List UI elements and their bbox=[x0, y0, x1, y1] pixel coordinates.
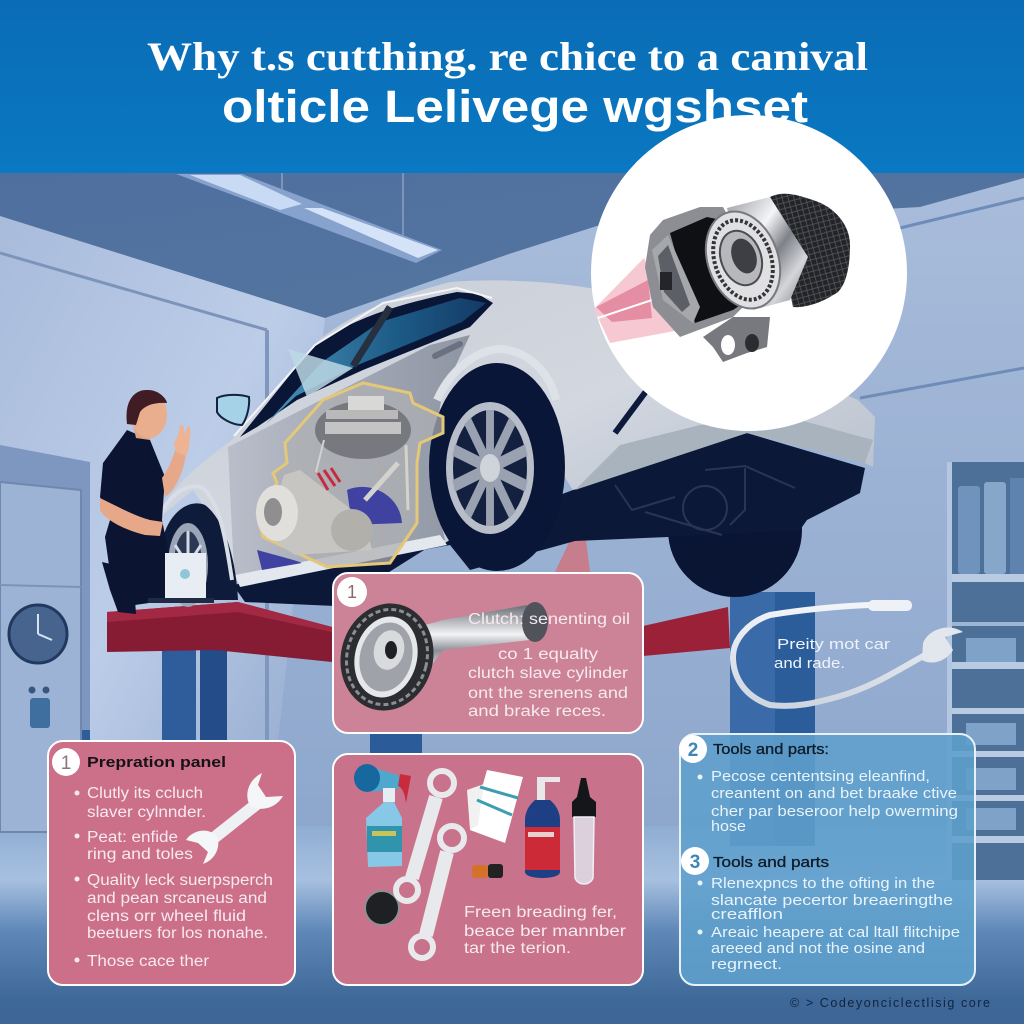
panel: clutch slave cylinder summary: and brake reces. bbox=[468, 703, 606, 720]
sill highlight bbox=[235, 535, 447, 587]
section 3 heading: 3 bbox=[690, 852, 700, 873]
title banner: Why t.s cutthing. re chice to a canival bbox=[147, 34, 868, 79]
door handle bbox=[435, 344, 460, 356]
section 3 text: slancate pecertor breaeringthe bbox=[711, 893, 953, 909]
middle wheel bbox=[437, 349, 556, 400]
suspension detail bbox=[615, 466, 795, 535]
section 3 text: regrnect. bbox=[711, 957, 782, 973]
panel: tools and parts bbox=[679, 734, 975, 985]
laptop bbox=[148, 553, 214, 603]
panel: tools and supplies bbox=[333, 754, 643, 985]
number badge: 1 bbox=[61, 753, 71, 774]
section 3 text: Areaic heapere at cal ltall flitchipe bbox=[711, 925, 960, 941]
icon: cloth bbox=[467, 770, 523, 843]
callout: clutch slave cylinder close-up bbox=[591, 115, 907, 431]
section 2 text: hose bbox=[711, 819, 746, 835]
panel: tools and supplies: tar the terion. bbox=[464, 940, 571, 957]
bleeder hose with wrench bbox=[733, 600, 963, 706]
bullet list: slaver cylnnder. bbox=[87, 804, 206, 821]
arms bbox=[100, 498, 163, 536]
icon: dropper vial bbox=[572, 778, 596, 884]
section 3 text: creafflon bbox=[711, 907, 783, 923]
panel: clutch slave cylinder summary: clutch slave cylinder bbox=[468, 665, 628, 682]
section 3 text: Rlenexpncs to the ofting in the bbox=[711, 876, 935, 892]
car bbox=[160, 280, 875, 607]
door with wall clock bbox=[0, 445, 90, 832]
mechanic bbox=[100, 390, 214, 614]
bullet list: Peat: enfide bbox=[87, 829, 178, 846]
side windows bbox=[240, 292, 493, 437]
panel: preparation bbox=[48, 741, 295, 985]
section 2 heading: 2 bbox=[688, 740, 698, 761]
icon: spanners bbox=[396, 771, 464, 958]
title banner bbox=[0, 0, 1024, 173]
rear wheel bbox=[668, 463, 802, 597]
section 3 heading: Tools and parts bbox=[713, 854, 829, 871]
section 2 text bbox=[698, 769, 958, 835]
section 3 text bbox=[698, 876, 960, 973]
bullet list: clens orr wheel fluid bbox=[87, 908, 246, 925]
front arch and wheel bbox=[160, 503, 238, 600]
section 3 text: areeed and not the osine and bbox=[711, 941, 925, 957]
mount lugs bbox=[703, 317, 770, 362]
panel: tools and supplies: Freen breading fer, bbox=[464, 904, 617, 921]
head bbox=[133, 425, 152, 440]
panel: clutch slave cylinder summary: co 1 equalty bbox=[498, 646, 598, 663]
car body shell bbox=[160, 280, 875, 582]
storage shelves bbox=[947, 462, 1024, 880]
translucent pane bbox=[288, 349, 353, 397]
panel: clutch slave cylinder summary bbox=[329, 573, 643, 733]
bullet list: and pean srcaneus and bbox=[87, 890, 267, 907]
section 2 text: Pecose cententsing eleanfind, bbox=[711, 769, 930, 785]
number badge: 1 bbox=[347, 582, 357, 602]
number badge bbox=[337, 577, 367, 607]
panel: tools and supplies: beace ber mannber bbox=[464, 923, 626, 940]
heading: Prepration panel bbox=[87, 754, 226, 771]
knurled end bbox=[770, 194, 850, 307]
door panel bbox=[228, 335, 470, 580]
bullet list: ring and toles bbox=[87, 846, 193, 863]
number badge bbox=[52, 748, 80, 776]
panel: clutch slave cylinder summary: Clutch: senenting oil bbox=[468, 611, 630, 628]
bleeder hose with wrench: and rade. bbox=[774, 655, 845, 672]
bullet list: Quality leck suerpsperch bbox=[87, 872, 273, 889]
shirt and trousers bbox=[100, 430, 172, 605]
red beam bbox=[594, 258, 680, 343]
icon: fluid bottle bbox=[525, 777, 560, 878]
icon: small fitting bbox=[472, 864, 503, 878]
rear lower panel bbox=[575, 420, 873, 490]
mirror bbox=[217, 395, 249, 425]
housing bbox=[645, 207, 770, 337]
section 2 heading bbox=[679, 735, 829, 763]
bullet list: Those cace ther bbox=[87, 953, 209, 970]
clutch part illustration bbox=[329, 593, 548, 721]
icon: spray bottle bbox=[354, 764, 411, 867]
bleeder hose with wrench: Preity mot car bbox=[777, 636, 890, 653]
bullet list bbox=[74, 785, 273, 970]
bullet list: beetuers for los nonahe. bbox=[87, 925, 268, 942]
footer credit: © > Codeyonciclectlisig core bbox=[790, 996, 990, 1010]
boot bbox=[102, 562, 136, 614]
panel: clutch slave cylinder summary: ont the srenens and bbox=[468, 685, 628, 702]
icon: wrench bbox=[186, 773, 283, 864]
section 2 text: cher par beseroor help owerming bbox=[711, 804, 958, 820]
icon: rubber cap bbox=[365, 891, 399, 925]
threaded collar bbox=[693, 201, 793, 319]
underbody bbox=[233, 433, 865, 606]
steel barrel bbox=[727, 197, 808, 310]
section 2 text: creantent on and bet braake ctive bbox=[711, 786, 957, 802]
section 3 heading bbox=[681, 847, 829, 875]
car lift bbox=[82, 532, 815, 846]
section 2 heading: Tools and parts: bbox=[713, 741, 829, 758]
bullet list: Clutly its ccluch bbox=[87, 785, 203, 802]
engine cutaway bbox=[256, 383, 443, 570]
title banner: olticle Lelivege wgshset bbox=[222, 81, 808, 132]
